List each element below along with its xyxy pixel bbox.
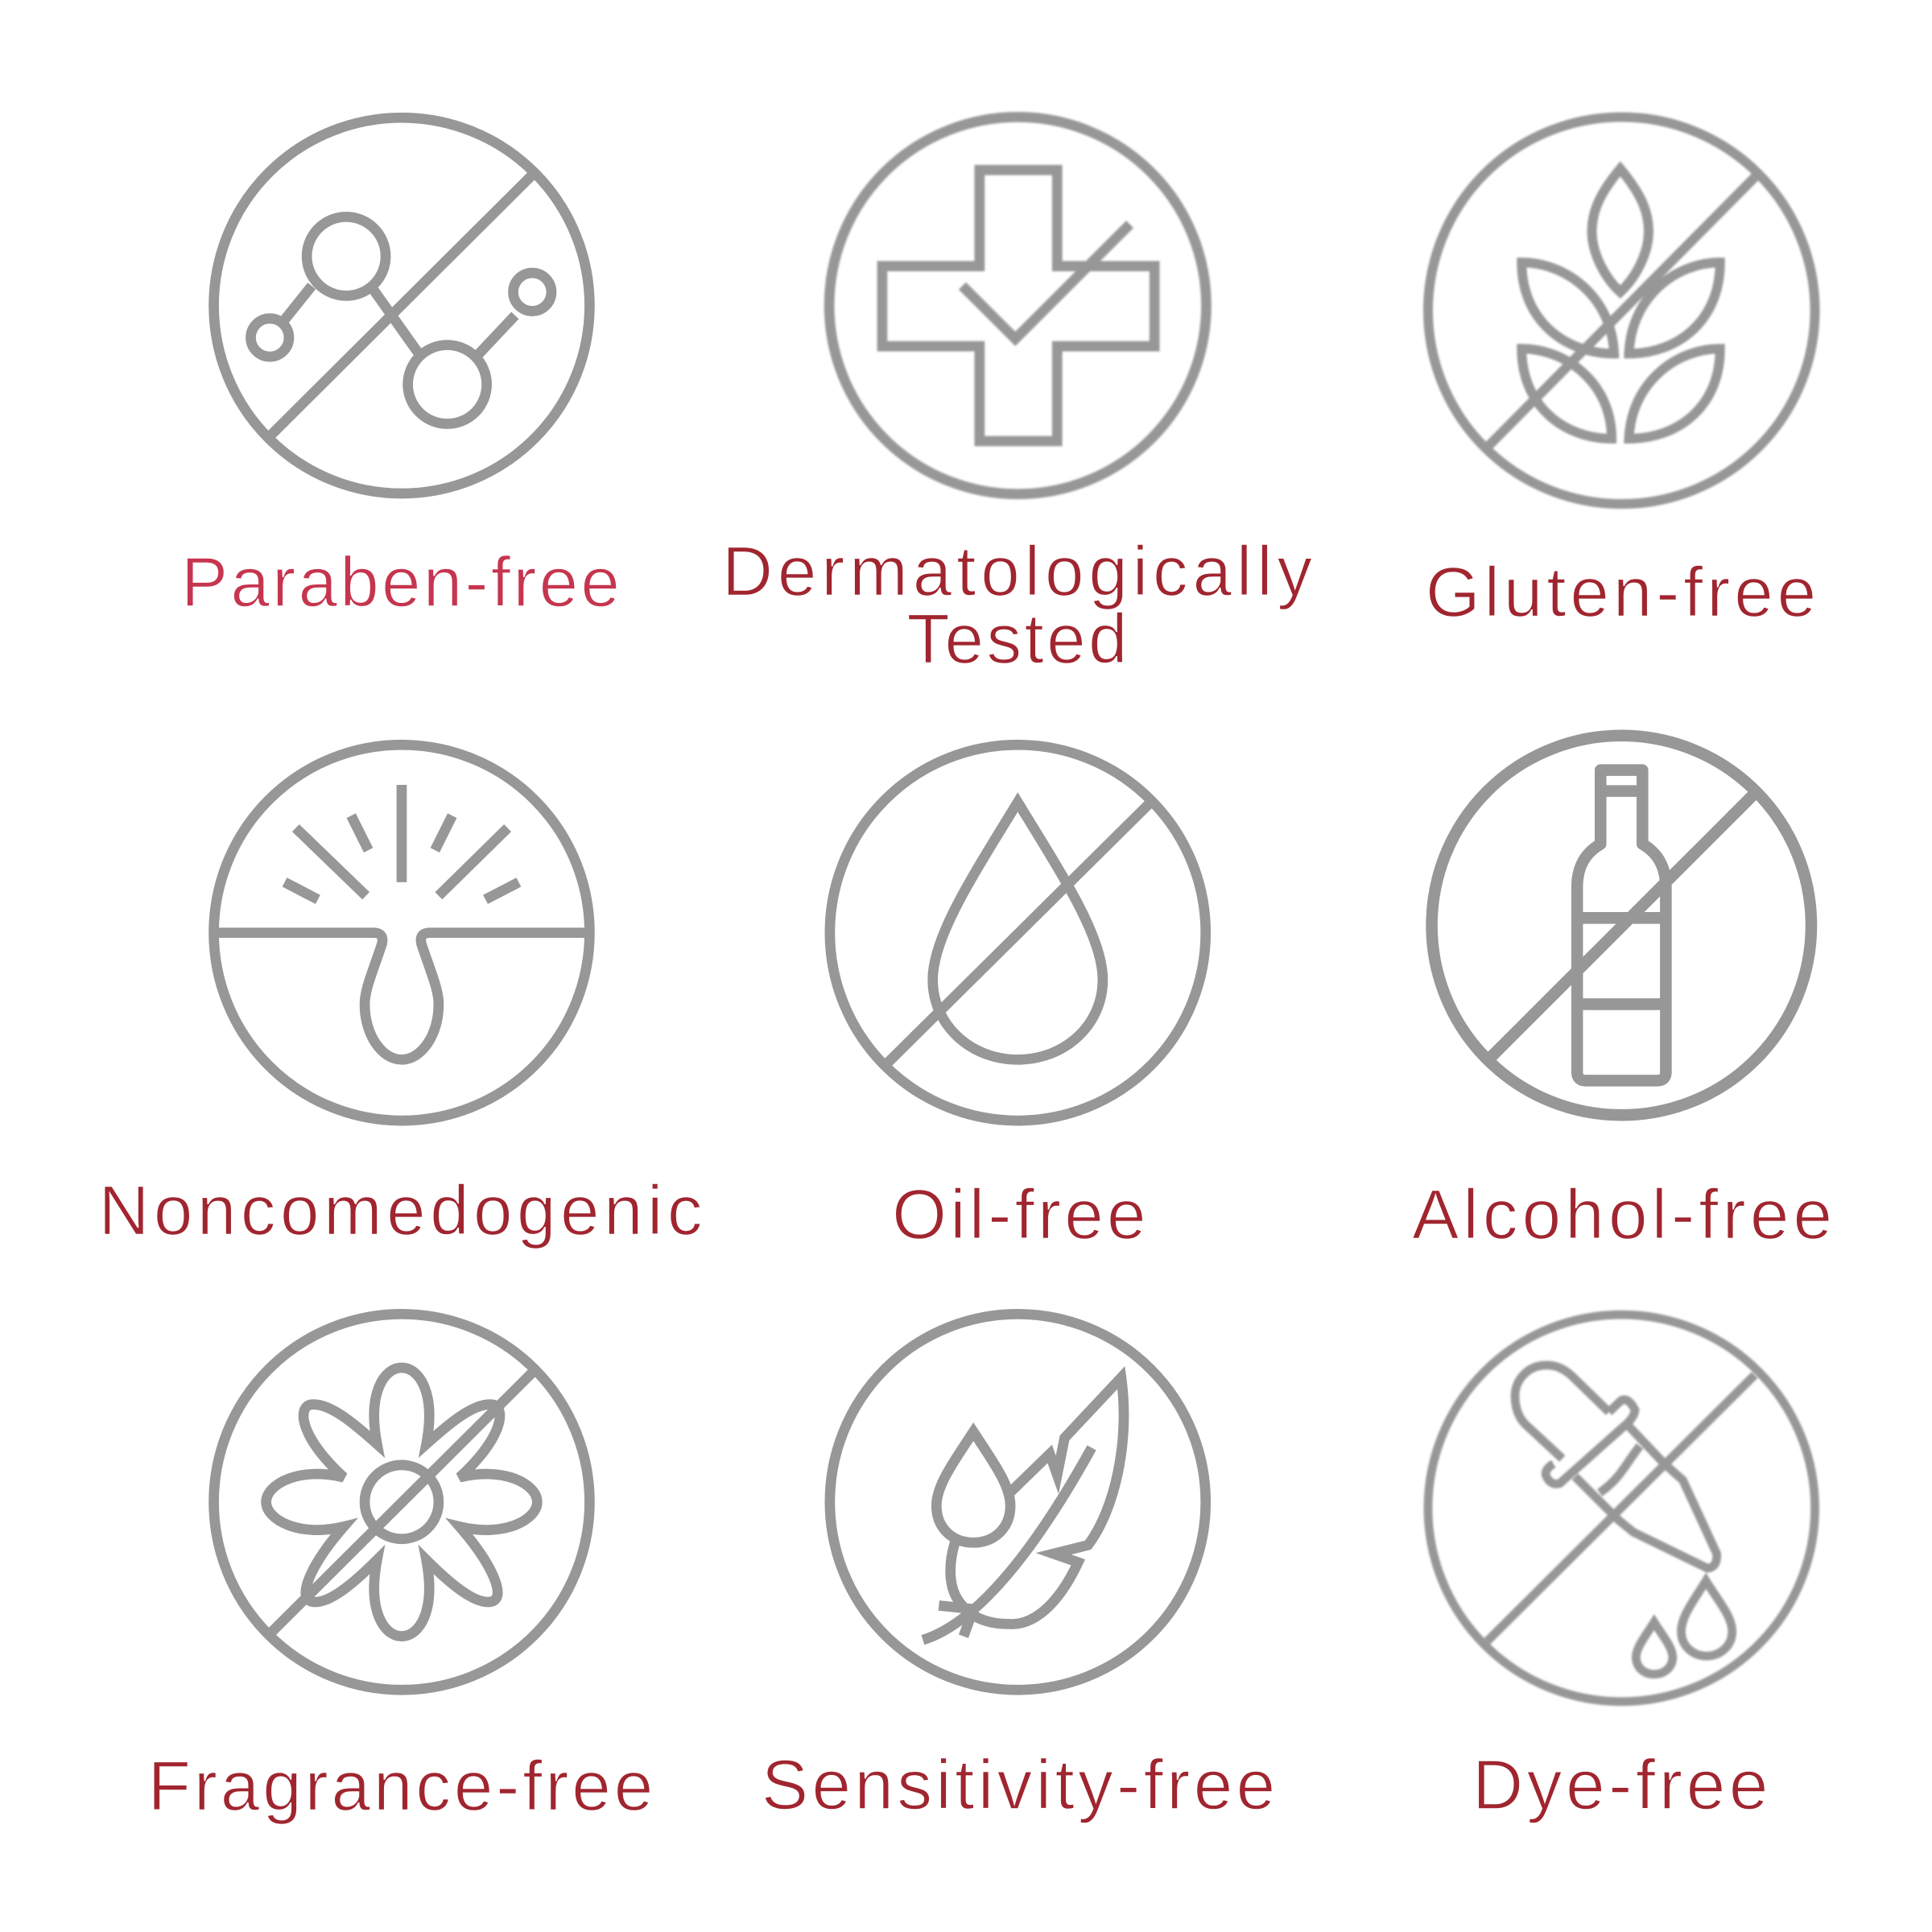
icon: sensitivity-free feather and drop <box>830 1314 1206 1690</box>
icon: gluten-free wheat <box>1428 117 1815 504</box>
label: Dermatologically Tested: Tested <box>907 600 1128 678</box>
icon: dye-free dropper <box>1428 1315 1815 1702</box>
icon: noncomedogenic pore <box>214 745 589 1121</box>
icon: alcohol-free bottle <box>1432 736 1811 1115</box>
label: Sensitivity-free: Sensitivity-free <box>762 1746 1275 1824</box>
label: Oil-free: Oil-free <box>892 1175 1146 1253</box>
label: Noncomedogenic: Noncomedogenic <box>98 1172 702 1250</box>
label: Dermatologically Tested <box>722 532 1312 678</box>
icon: fragrance-free flower <box>214 1314 589 1690</box>
label: Fragrance-free: Fragrance-free <box>148 1747 653 1825</box>
icon: dermatologically tested cross <box>829 117 1206 494</box>
label: Dermatologically Tested: Dermatologically <box>722 532 1312 610</box>
icon: oil-free drop <box>830 745 1206 1121</box>
label: Dye-free: Dye-free <box>1472 1746 1768 1824</box>
label: Alcohol-free: Alcohol-free <box>1412 1175 1832 1253</box>
label: Paraben-free: Paraben-free <box>181 543 620 621</box>
icon: paraben-free molecule <box>214 118 589 493</box>
label: Gluten-free: Gluten-free <box>1426 553 1816 631</box>
